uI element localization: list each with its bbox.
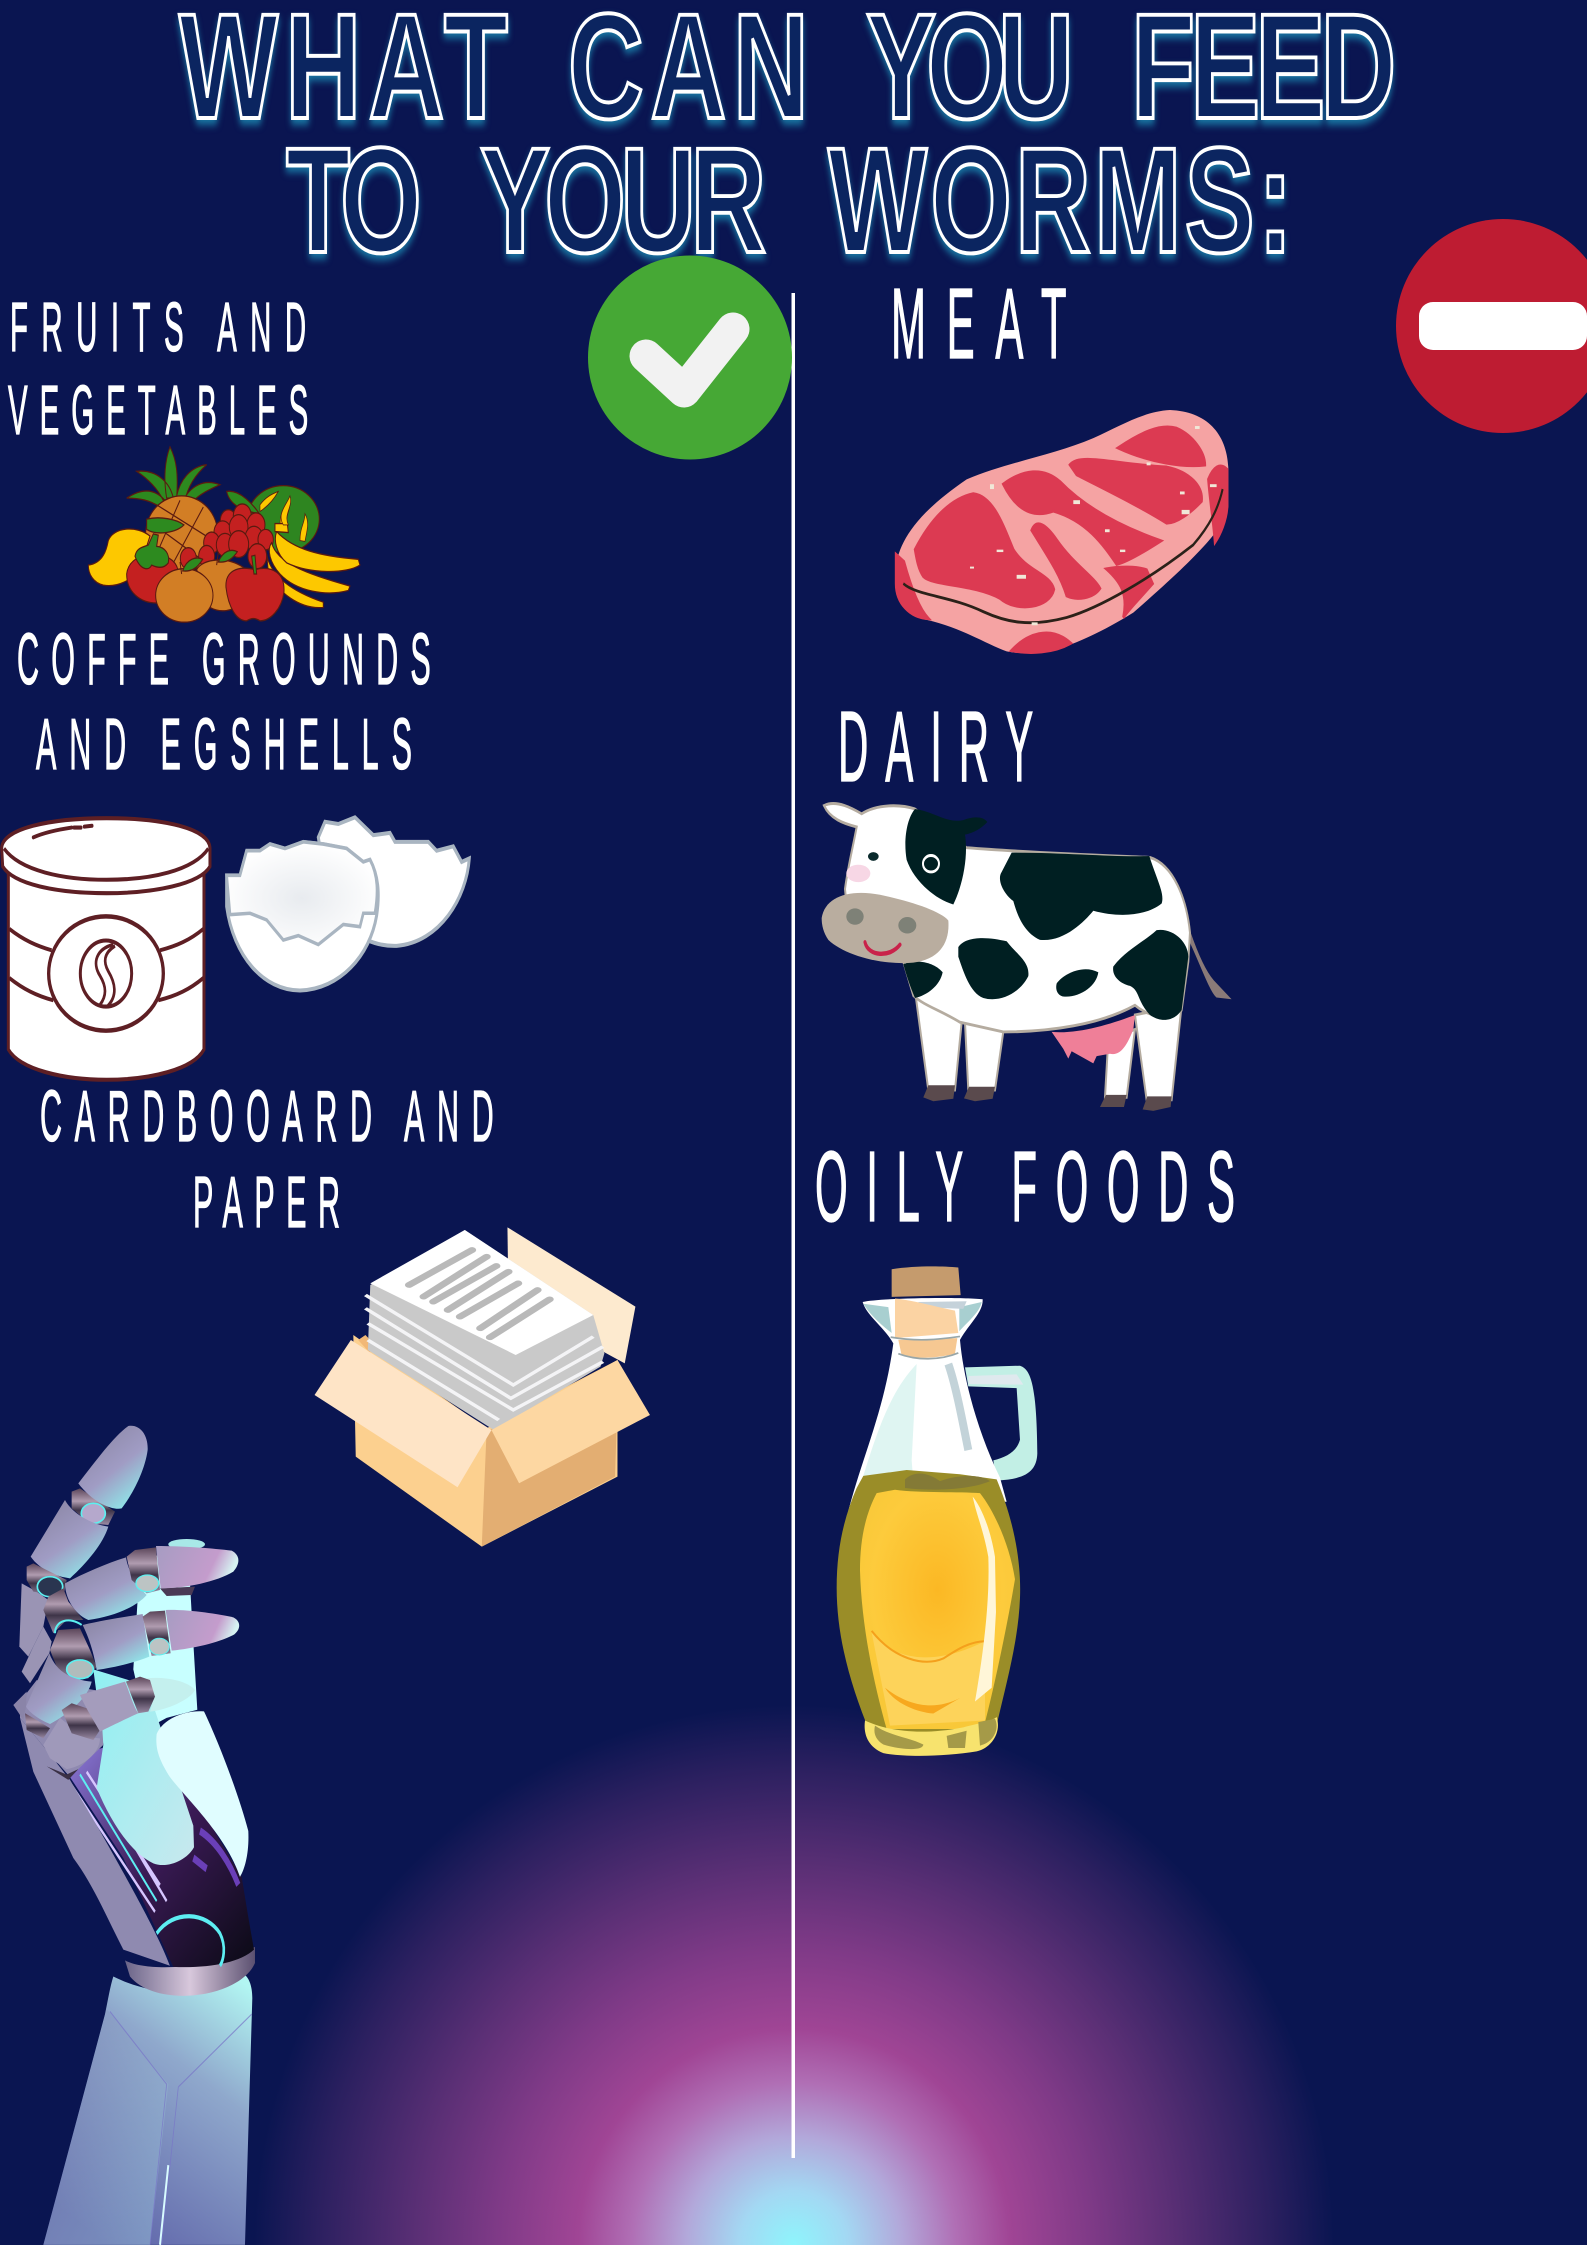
title: WORMS: [828,118,1293,284]
icon: coffee can [2,818,210,1080]
heading: coffee grounds and eggshells: COFFE GROUNDS [17,619,431,700]
title: YOUR [480,118,766,284]
heading: fruits and vegetables [8,288,308,450]
hand upper section: fingers [13,1426,239,1740]
title [179,0,1396,284]
icon: olive oil bottle [837,1266,1037,1756]
heading: oily foods: OILY FOODS [815,1132,1235,1243]
icon: fruit pile [88,447,360,622]
title: TO [286,118,422,284]
heading: fruits and vegetables: FRUITS AND [10,288,306,367]
heading: fruits and vegetables: VEGETABLES [8,371,308,450]
radial light glow [254,1705,1334,2245]
heading: cardboard and paper: CARDBOOARD AND [40,1076,494,1157]
heading: coffee grounds and eggshells [17,619,431,785]
icon: red no-entry badge [1396,219,1587,433]
icon: steak [895,410,1228,653]
icon: green check badge [588,256,792,460]
icon: cardboard box with paper [315,1227,650,1547]
heading: cardboard and paper: PAPER [193,1162,340,1243]
heading: cardboard and paper [40,1076,494,1243]
heading: meat: MEAT [891,269,1067,380]
heading: dairy: DAIRY [838,692,1033,803]
heading: coffee grounds and eggshells: AND EGSHELLS [36,704,412,785]
hand lower section: forearm and palm [20,1541,255,2245]
center divider line [792,293,795,2158]
icon: robot hand [13,1426,255,2245]
icon: cow [822,804,1229,1111]
icon: eggshells [227,817,469,990]
